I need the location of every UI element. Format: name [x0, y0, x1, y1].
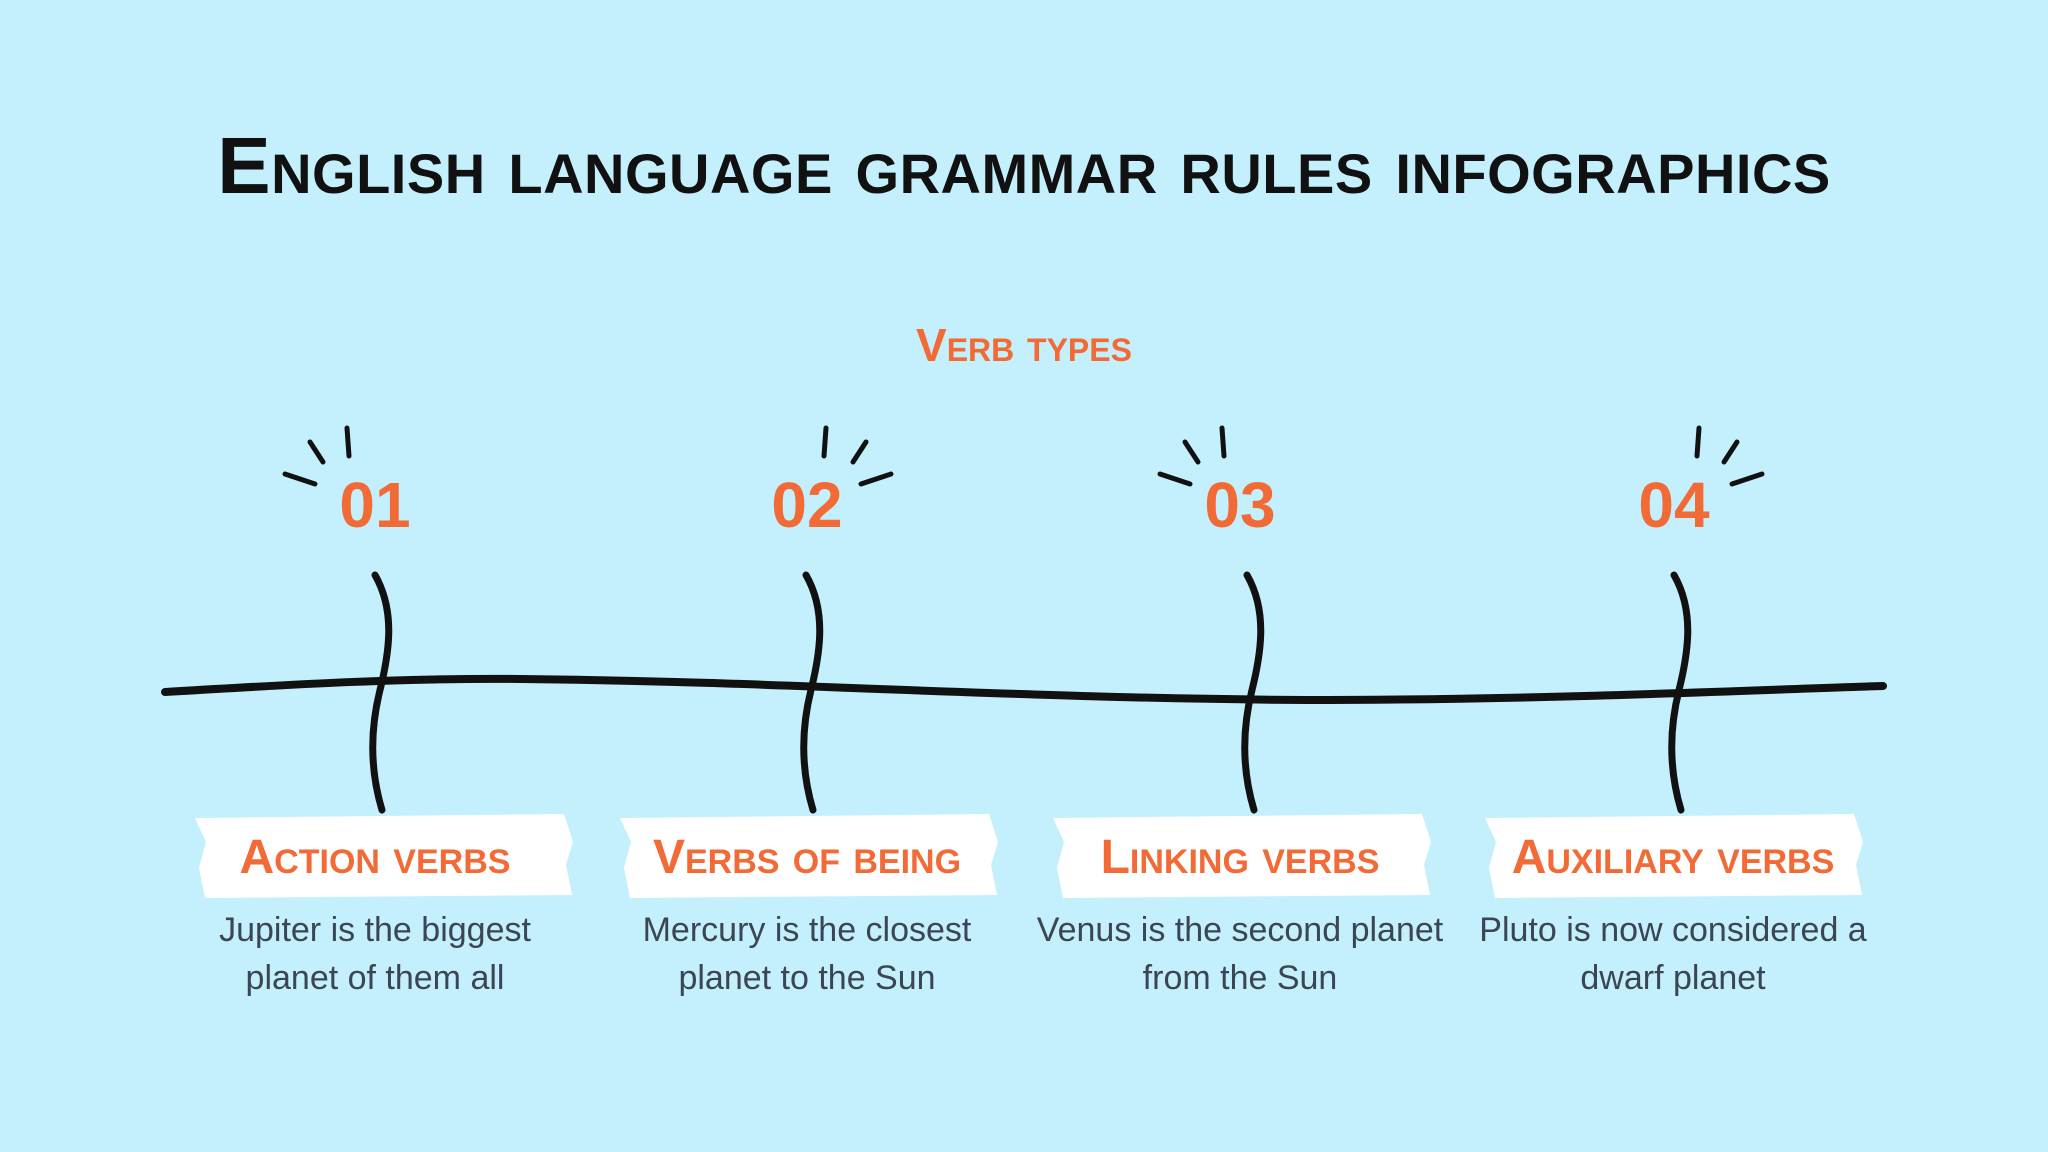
- sparkles: [285, 428, 1762, 484]
- descriptions: [219, 911, 531, 997]
- text: Venus is the second planet: [1037, 911, 1443, 949]
- labels: Action verbs: [240, 831, 510, 884]
- connectors: [373, 575, 1688, 810]
- descriptions: Jupiter is the biggest: [219, 911, 531, 949]
- text: 04: [1638, 469, 1710, 541]
- text: dwarf planet: [1580, 959, 1766, 997]
- text: Auxiliary verbs: [1512, 831, 1834, 884]
- text: 02: [771, 469, 843, 541]
- text: Mercury is the closest: [643, 911, 971, 949]
- text: Linking verbs: [1101, 831, 1379, 884]
- descriptions: planet of them all: [246, 959, 504, 997]
- timeline line: [165, 679, 1883, 700]
- text: Pluto is now considered a: [1479, 911, 1867, 949]
- text: 03: [1204, 469, 1276, 541]
- title: English language grammar rules infographics: [217, 121, 1831, 210]
- text: planet to the Sun: [678, 959, 936, 997]
- numbers: 01: [339, 469, 411, 541]
- text: Verbs of being: [653, 831, 961, 884]
- tapes: [195, 814, 1863, 898]
- text: from the Sun: [1143, 959, 1337, 997]
- subtitle: Verb types: [916, 319, 1132, 371]
